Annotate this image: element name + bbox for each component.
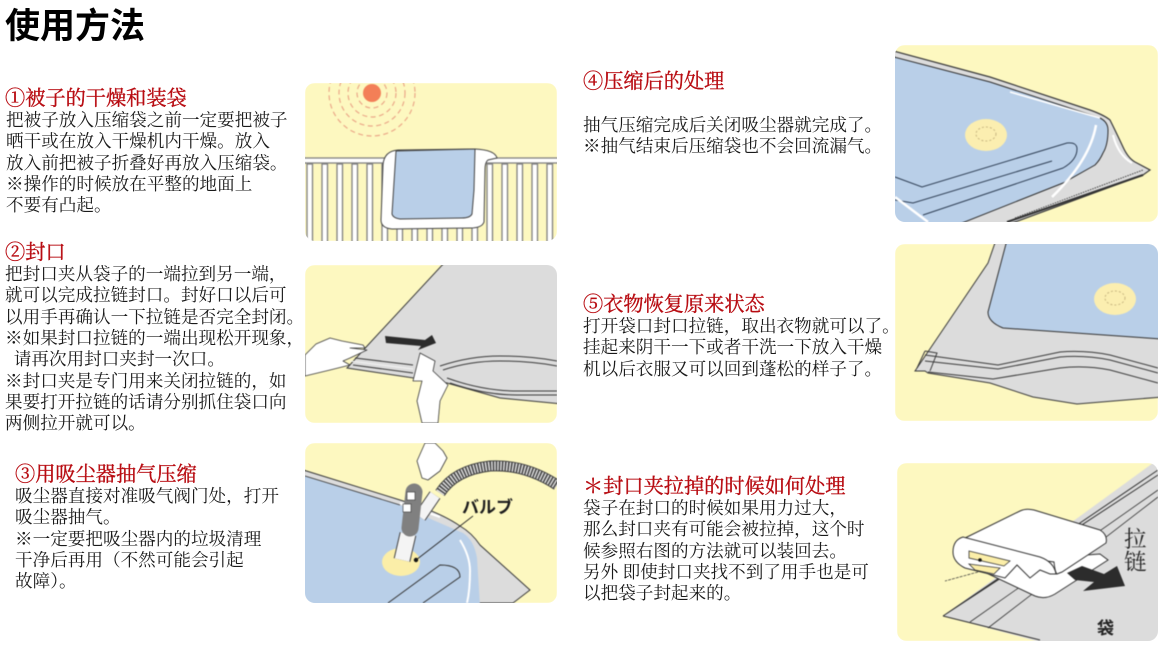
- label: zipper: 拉: [1124, 527, 1147, 552]
- text: clip troubleshooting: 以把袋子封起来的。: [583, 583, 741, 603]
- text: step 3: 故障）。: [15, 571, 77, 591]
- text: step 1: 不要有凸起。: [6, 195, 112, 215]
- bag: [347, 262, 562, 404]
- text: step 5: 打开袋口封口拉链，取出衣物就可以了。: [583, 316, 900, 336]
- text: step 4: ※抽气结束后压缩袋也不会回流漏气。: [583, 136, 882, 156]
- futon hung over railing: [381, 149, 497, 229]
- zipper lines: [350, 356, 557, 395]
- heading: clip troubleshooting: ＊封口夹拉掉的时候如何处理: [583, 476, 845, 498]
- railing with white bars: [301, 158, 561, 244]
- text: step 2: 就可以完成拉链封口。封好口以后可: [5, 285, 287, 305]
- vacuum wand: [402, 492, 415, 560]
- bag: [890, 50, 1150, 225]
- text: step 3: ※一定要把吸尘器内的垃圾清理: [15, 529, 261, 549]
- text: step 2: [5, 264, 304, 433]
- text: clip troubleshooting: 袋子在封口的时候如果用力过大，: [583, 498, 847, 518]
- text: clip troubleshooting: [583, 498, 869, 603]
- bag: [943, 463, 1165, 645]
- arrow: [385, 335, 436, 350]
- heading: step 4: ④压缩后的处理: [583, 71, 724, 93]
- text: step 2: 以用手再确认一下拉链是否完全封闭。: [5, 307, 304, 327]
- bag creases: [895, 143, 1077, 215]
- heading: step 1: ①被子的干燥和装袋: [5, 88, 187, 110]
- text: step 1: 晒干或在放入干燥机内干燥。放入: [6, 131, 270, 151]
- text: clip troubleshooting: 候参照右图的方法就可以装回去。: [583, 541, 847, 561]
- icon: left hand: [305, 338, 367, 376]
- icon: hand: [417, 443, 447, 480]
- text: step 1: 把被子放入压缩袋之前一定要把被子: [6, 110, 288, 130]
- bag: [300, 469, 530, 603]
- zipper lines: [917, 351, 1158, 383]
- text: step 2: 两侧拉开就可以。: [5, 413, 146, 433]
- panel: step 2 illustration, sealing the zipper: [305, 265, 557, 423]
- valve callout: [414, 497, 513, 562]
- slider clip: [945, 509, 1108, 598]
- text: step 2: ※如果封口拉链的一端出现松开现象，: [5, 328, 304, 348]
- panel: clip reattachment illustration: [897, 463, 1158, 641]
- icon: sun with dashed rays: [328, 83, 416, 138]
- text: step 3: 吸尘器抽气。: [15, 507, 121, 527]
- panel: step 4 illustration, compressed bag: [895, 45, 1158, 222]
- text: step 4: [583, 115, 882, 156]
- label: zipper: 链: [1124, 550, 1147, 575]
- panel: step 3 illustration, vacuum on valve: [305, 443, 557, 603]
- label: bag: 袋: [1097, 619, 1114, 638]
- text: step 3: 干净后再用（不然可能会引起: [15, 550, 244, 570]
- heading: step 3: ③用吸尘器抽气压缩: [15, 464, 197, 486]
- label: zipper: [1124, 527, 1147, 575]
- bag: [915, 240, 1162, 404]
- text: clip troubleshooting: 那么封口夹有可能会被拉掉，这个时: [583, 519, 865, 539]
- text: step 3: [15, 486, 279, 591]
- text: step 2: ※封口夹是专门用来关闭拉链的，如: [5, 371, 287, 391]
- text: step 1: [6, 110, 288, 215]
- text: clip troubleshooting: 另外 即使封口夹找不到了用手也是可: [583, 562, 869, 582]
- text: step 2: 把封口夹从袋子的一端拉到另一端，: [5, 264, 287, 284]
- text: step 5: 挂起来阴干一下或者干洗一下放入干燥: [583, 337, 882, 357]
- title: 使用方法: [5, 7, 145, 46]
- valve: [382, 548, 420, 576]
- text: step 3: 吸尘器直接对准吸气阀门处，打开: [15, 486, 279, 506]
- panel: step 5 illustration, opened bag: [895, 244, 1158, 421]
- text: step 2: 果要打开拉链的话请分别抓住袋口向: [5, 392, 287, 412]
- text: step 2: 请再次用封口夹封一次口。: [14, 349, 225, 369]
- heading: step 5: ⑤衣物恢复原来状态: [583, 294, 765, 316]
- text: step 5: 机以后衣服又可以回到蓬松的样子了。: [583, 359, 882, 379]
- text: step 4: 抽气压缩完成后关闭吸尘器就完成了。: [583, 115, 882, 135]
- valve: [965, 119, 1007, 151]
- arrow: [1067, 566, 1125, 591]
- heading: step 2: ②封口: [5, 242, 66, 264]
- text: step 5: [583, 316, 900, 379]
- vacuum hose: [420, 466, 557, 517]
- valve callout: バルブ: [462, 497, 513, 517]
- text: step 1: ※操作的时候放在平整的地面上: [6, 174, 252, 194]
- valve: [1094, 283, 1136, 315]
- text: step 1: 放入前把被子折叠好再放入压缩袋。: [6, 153, 288, 173]
- icon: right hand: [413, 353, 448, 423]
- panel: step 1 illustration, futon drying in the sun: [305, 83, 557, 241]
